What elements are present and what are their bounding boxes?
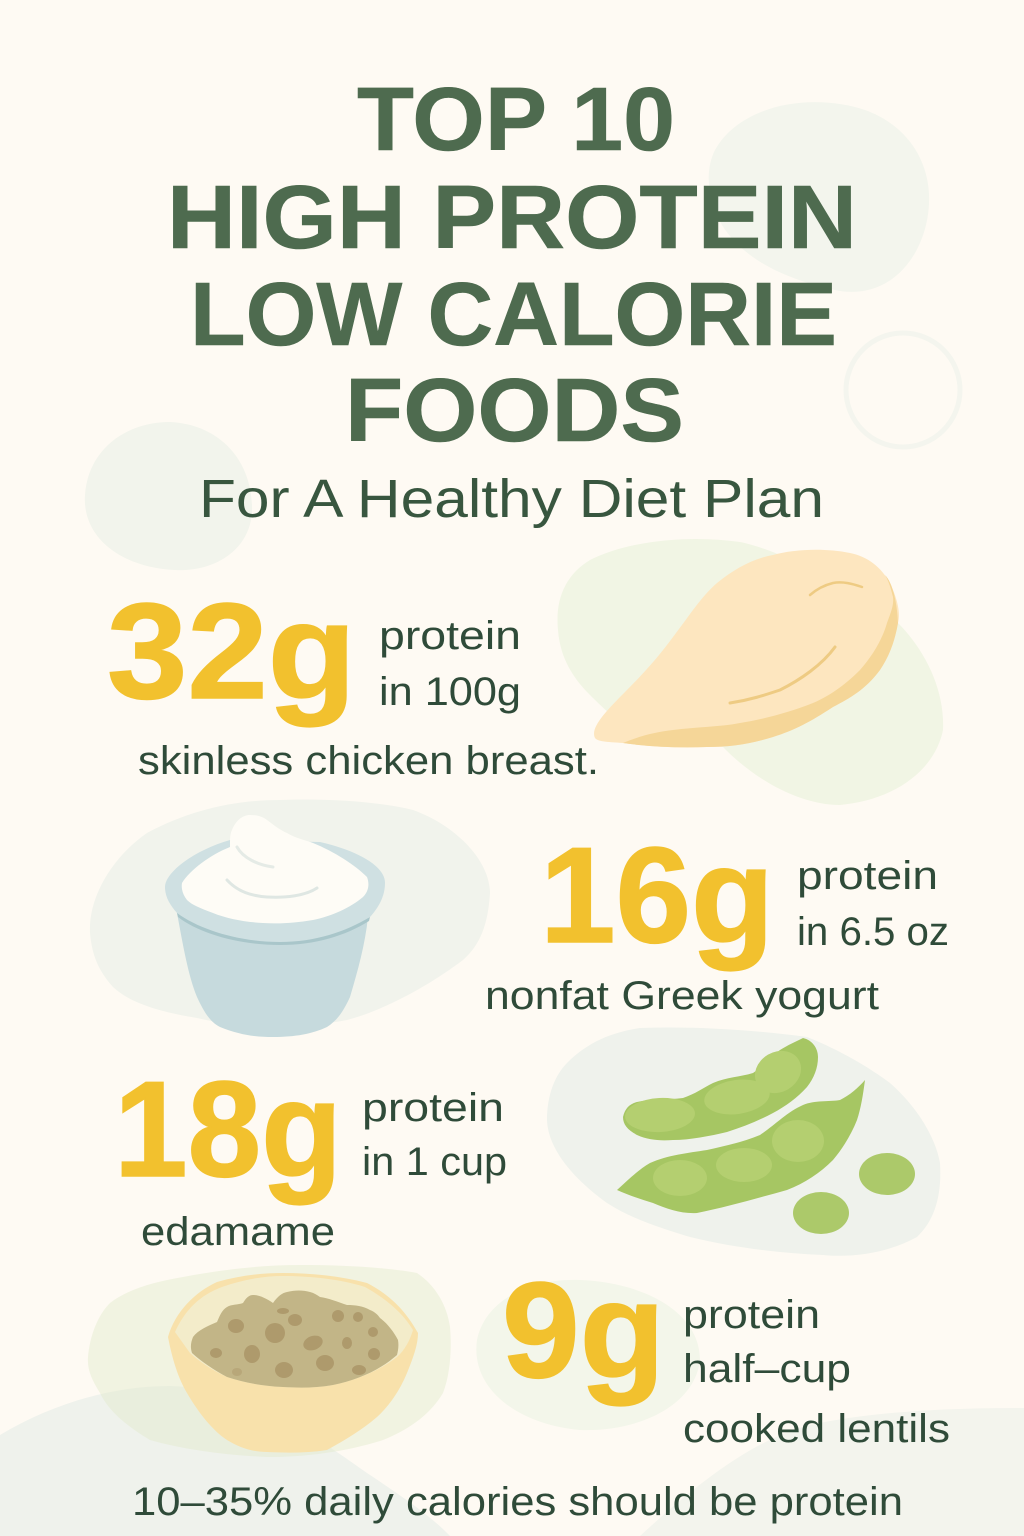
footer note: 10–35% daily calories should be protein — [132, 1480, 903, 1524]
stat: 18g protein in 1 cup: 18g — [114, 1053, 342, 1205]
stat: 9g protein half-cup — [502, 1254, 851, 1406]
icon: lentil bowl — [88, 1265, 451, 1457]
stat: 9g protein half-cup: 9g — [502, 1254, 665, 1406]
stat: 18g protein in 1 cup — [114, 1053, 507, 1205]
panel: lentils — [88, 1254, 950, 1457]
label: skinless chicken breast: skinless chicken breast. — [138, 739, 599, 783]
stat: 18g protein in 1 cup: protein — [362, 1086, 504, 1130]
title: TOP 10 — [357, 70, 675, 170]
stat: 16g protein in 6.5 oz — [540, 819, 949, 971]
icon: edamame pods — [547, 1027, 940, 1256]
label: cooked lentils: cooked lentils — [683, 1407, 950, 1451]
stat: 16g protein in 6.5 oz: in 6.5 oz — [797, 910, 949, 954]
title: LOW CALORIE — [190, 265, 837, 365]
stat: 16g protein in 6.5 oz: 16g — [540, 819, 774, 971]
stat: 16g protein in 6.5 oz: protein — [797, 854, 938, 898]
label: edamame: edamame — [141, 1210, 335, 1254]
panel: chicken breast — [107, 539, 943, 805]
stat: 32g protein in 100g: 32g — [107, 575, 356, 727]
stat: 9g protein half-cup: protein — [683, 1293, 820, 1337]
stat: 32g protein in 100g: protein — [379, 614, 521, 658]
stat: 18g protein in 1 cup: in 1 cup — [362, 1140, 507, 1184]
title — [167, 70, 857, 461]
label: nonfat Greek yogurt: nonfat Greek yogurt — [485, 974, 879, 1018]
icon: chicken breast — [557, 539, 943, 805]
stat: 32g protein in 100g — [107, 575, 521, 727]
title: HIGH PROTEIN — [167, 168, 857, 268]
stat: 32g protein in 100g: in 100g — [379, 670, 521, 714]
panel: edamame — [114, 1027, 940, 1256]
subtitle: For A Healthy Diet Plan — [199, 469, 824, 529]
icon: yogurt cup — [90, 799, 490, 1037]
panel: Greek yogurt — [90, 799, 949, 1037]
stat: 9g protein half-cup: half–cup — [683, 1347, 851, 1391]
title: FOODS — [345, 361, 684, 461]
